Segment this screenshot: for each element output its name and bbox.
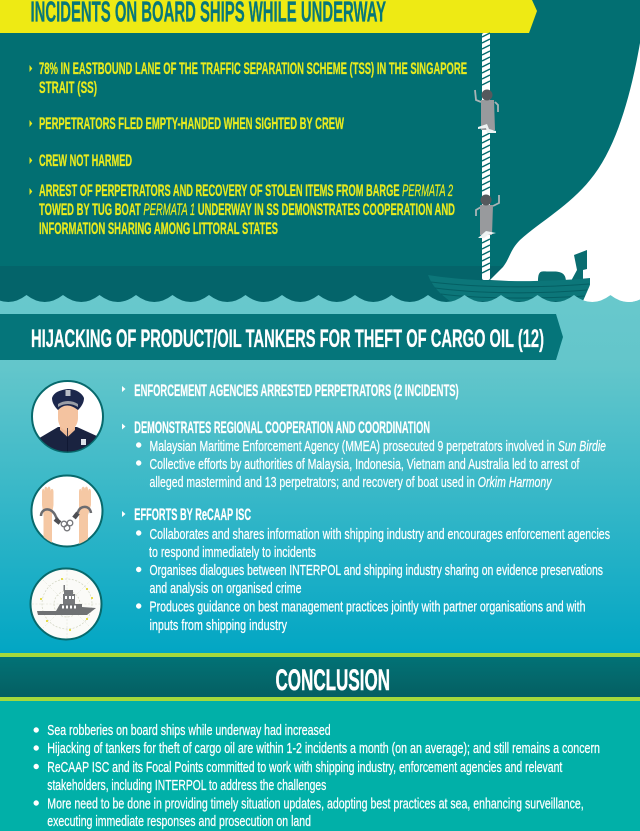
white ship hull [490,43,640,302]
text block: incident bullets [30,59,467,238]
text block: hijacking bullets [122,381,610,634]
text block: hijacking bullets: EFFORTS BY ReCAAP ISC [134,505,251,524]
icon: boat [428,250,590,301]
white wave over sea on right [585,285,640,302]
panel: conclusion [0,653,640,831]
text block: incident bullets: STRAIT (SS) [39,78,97,97]
text block: conclusion bullets: stakeholders, including INTERPOL to address the challenges [47,777,326,794]
text block: hijacking bullets: to respond immediately to incidents [149,544,316,561]
sea background [0,295,640,653]
icon: climber lower [476,194,499,238]
icon: rope [482,33,490,280]
bullet markers [30,65,32,195]
text block: conclusion bullets: Sea robberies on board ships while underway had increased [47,722,331,739]
dots [136,442,141,609]
dark sea band [0,266,640,302]
text block: hijacking bullets: and analysis on organised crime [150,580,302,597]
panel: incidents on board ships while underway [0,0,640,302]
text block: incident bullets: TOWED BY TUG BOAT PERMATA 1 UNDERWAY IN SS DEMONSTRATES COOPERATION AND [39,200,455,219]
text block: conclusion bullets [34,722,600,830]
heading: conclusion: CONCLUSION [276,664,390,697]
text block: incident bullets: INFORMATION SHARING AMONG LITTORAL STATES [39,219,278,238]
icon: handcuffed hands [32,476,102,550]
text block: incident bullets: PERPETRATORS FLED EMPTY-HANDED WHEN SIGHTED BY CREW [39,114,344,133]
arrow markers [122,386,126,517]
text block: hijacking bullets: alleged mastermind and 13 perpetrators; and recovery of boat used in Orkim Harmony [150,474,553,491]
text block: incident bullets: CREW NOT HARMED [39,151,132,170]
banner: hijacking heading [0,314,563,360]
icon: ship on radar [30,568,102,640]
text block: hijacking bullets: inputs from shipping industry [150,617,287,634]
icon: police officer [32,381,103,456]
text block: conclusion bullets: executing immediate responses and prosecution on land [47,813,311,830]
icon: climber upper [475,90,498,133]
